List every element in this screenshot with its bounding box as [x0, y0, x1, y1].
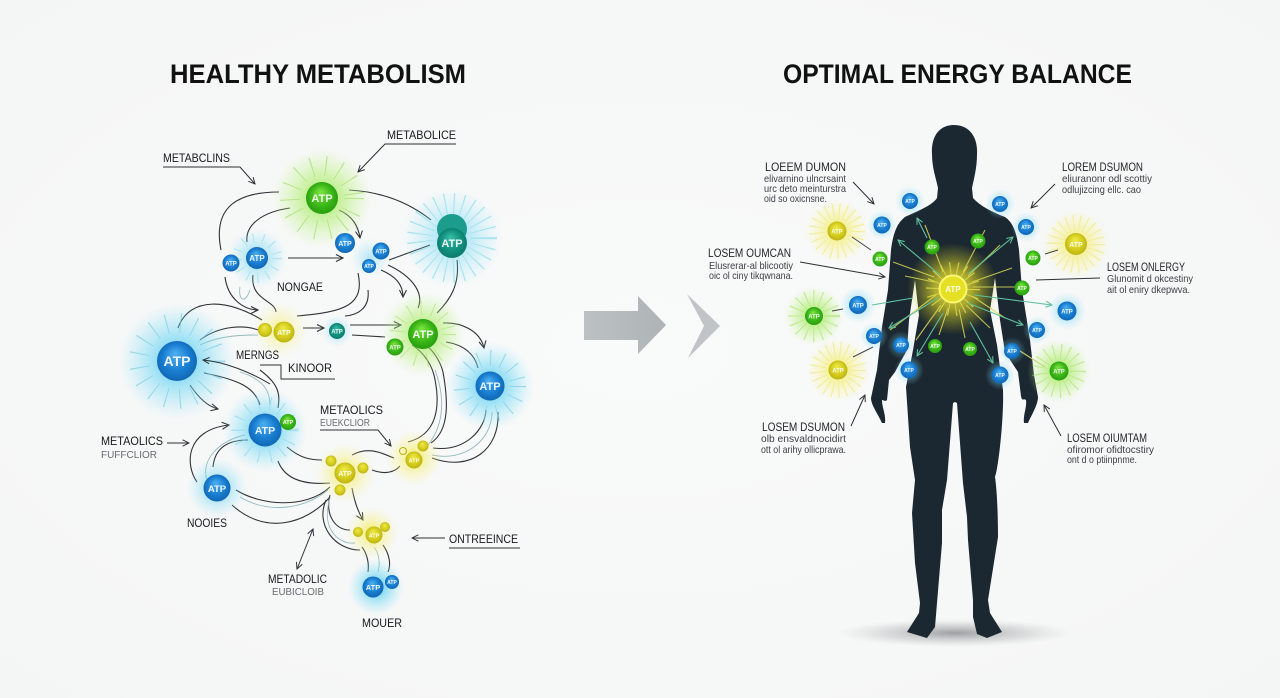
node: blue ATP lower: ATP: [208, 484, 227, 495]
node: yellow cluster center: ATP: [338, 471, 352, 478]
node: yellow cluster lower: [346, 507, 398, 559]
node: blue ATP bottom: ATP: [387, 580, 397, 586]
node: small teal: [321, 315, 353, 347]
node: green left: [784, 286, 844, 346]
text block: middle left: [708, 248, 885, 282]
node: blue ATP pair: ATP: [225, 262, 237, 268]
node: yellow ATP pair: [252, 302, 308, 358]
text block: upper left: [764, 162, 874, 205]
node: yellow cluster center: [315, 443, 375, 503]
node: blue ATP bottom: [348, 559, 404, 615]
text block: upper left: urc deto meinturstra: [764, 183, 846, 195]
arrow: grey block arrow: [584, 296, 666, 354]
node: blue ATP pair: ATP: [249, 254, 265, 263]
label: METADOLIC: [268, 529, 327, 598]
node: green left: ATP: [808, 314, 820, 320]
node: yellow lower left: [806, 338, 870, 402]
arrow: grey chevron: [687, 294, 720, 358]
small green nodes: ATP: [930, 344, 940, 350]
text block: upper right: LOREM DSUMON: [1062, 162, 1143, 174]
text block: lower right: ofiromor ofidtocstiry: [1067, 444, 1155, 456]
small blue nodes: ATP: [1007, 349, 1017, 355]
text block: upper right: eliuranonr odl scottiy: [1062, 173, 1153, 185]
label: NONGAE: NONGAE: [277, 280, 323, 294]
node: blue ATP right: [446, 342, 534, 430]
small blue nodes: ATP: [904, 368, 914, 374]
label: METADOLIC: EUBICLOIB: [272, 587, 324, 598]
label: MOUER: MOUER: [362, 616, 402, 630]
node: small blue cluster: ATP: [364, 264, 374, 270]
small green nodes: ATP: [1028, 256, 1038, 262]
text block: middle right: LOSEM ONLERGY: [1107, 262, 1185, 274]
node: blue ATP lower: [187, 458, 247, 518]
small blue nodes: [840, 186, 1086, 390]
label: METABCLINS: [163, 151, 255, 184]
node: teal ATP: [402, 188, 502, 288]
label: METAOLICS left: FUFFCLIOR: [101, 450, 157, 461]
floor shadow: [837, 619, 1073, 647]
text block: middle right: ait ol eniry dkepwva.: [1107, 284, 1190, 296]
node: blue ATP right: ATP: [479, 381, 501, 393]
text block: lower right: ont d o ptiinpnme.: [1067, 454, 1137, 466]
arrow: to large blue node: [203, 360, 270, 384]
label: METAOLICS centre: [320, 403, 391, 446]
panel: metabolic network: [101, 128, 534, 630]
text block: middle left: oic ol ciny tikqwnana.: [709, 270, 793, 282]
small blue nodes: ATP: [995, 373, 1005, 379]
title: Healthy Metabolism: HEALTHY METABOLISM: [170, 59, 466, 89]
node: small teal: ATP: [331, 330, 343, 336]
label: METAOLICS centre: EUEKCLIOR: [320, 418, 370, 429]
node: central yellow ATP: ATP: [945, 285, 961, 294]
node: green ATP pair: ATP: [389, 346, 401, 352]
connector stubs: [832, 237, 1058, 357]
node: small blue cluster: ATP: [338, 241, 352, 248]
small green nodes: ATP: [965, 347, 975, 353]
node: yellow ATP pair: ATP: [277, 330, 291, 337]
central energy rays: [872, 218, 1052, 367]
text block: middle left: Elusrerar-al blicootiy: [709, 260, 794, 272]
node: blue ATP with green: ATP: [283, 420, 294, 426]
text block: middle left: LOSEM OUMCAN: [708, 248, 791, 260]
small blue nodes: ATP: [995, 202, 1005, 208]
small green nodes: ATP: [973, 239, 983, 245]
connector curves: [178, 190, 498, 572]
node: blue ATP bottom: ATP: [366, 583, 380, 592]
node: central yellow ATP: [940, 276, 966, 302]
body silhouette: [871, 125, 1038, 638]
label: NOOIES: NOOIES: [187, 516, 227, 530]
small green nodes: [872, 234, 1040, 356]
text block: lower left: olb ensvaldnocidirt: [761, 433, 846, 445]
text block: upper right: [1031, 162, 1153, 208]
node: blue ATP pair: [222, 228, 287, 288]
label: MERNGS: MERNGS: [236, 348, 279, 362]
node: yellow upper right: ATP: [1069, 242, 1083, 249]
node: teal ATP: ATP: [441, 238, 463, 250]
text block: upper left: LOEEM DUMON: [765, 162, 846, 174]
small blue nodes: ATP: [905, 199, 915, 205]
node: yellow upper right: [1042, 210, 1110, 278]
small green nodes: ATP: [927, 245, 937, 251]
text block: middle right: Glunomit d okcestiny: [1107, 273, 1194, 285]
label: ONTREEINCE: [412, 532, 520, 548]
title: Optimal Energy Balance: OPTIMAL ENERGY BALANCE: [783, 59, 1132, 89]
small blue nodes: ATP: [877, 223, 887, 229]
label: KINOOR: [260, 361, 335, 379]
node: yellow cluster right: [386, 430, 442, 486]
text block: middle right: [1036, 262, 1194, 296]
small blue nodes: ATP: [1021, 225, 1031, 231]
node: blue ATP with green: ATP: [255, 425, 275, 437]
node: large blue ATP: [119, 303, 235, 419]
text block: lower right: [1044, 405, 1155, 466]
node: blue ATP with green: [223, 388, 307, 472]
node: green ATP: ATP: [311, 193, 333, 205]
node: yellow upper left: [805, 199, 869, 263]
node: yellow cluster lower: ATP: [369, 534, 380, 540]
small blue nodes: ATP: [1032, 328, 1042, 334]
text block: lower right: LOSEM OIUMTAM: [1067, 433, 1147, 445]
node: large blue ATP: ATP: [164, 353, 190, 369]
node: green ATP: [272, 148, 372, 248]
pale connector curves: [200, 287, 492, 572]
text block: lower left: [761, 395, 865, 456]
text block: upper left: elivarnino ulncrsaint: [764, 173, 846, 185]
node: yellow upper left: ATP: [831, 230, 843, 236]
small green nodes: ATP: [1017, 286, 1027, 292]
node: green right: [1027, 339, 1091, 403]
small blue nodes: ATP: [1061, 310, 1073, 316]
panel: human body energy map: [708, 125, 1194, 647]
small green nodes: ATP: [875, 257, 885, 263]
node: small blue cluster: ATP: [375, 250, 387, 256]
node: yellow lower left: ATP: [832, 368, 844, 374]
node: yellow cluster right: ATP: [409, 458, 420, 464]
label: METAOLICS left: METAOLICS: [101, 434, 163, 448]
text block: upper right: odlujizcing ellc. cao: [1062, 184, 1141, 196]
label: METAOLICS left: [101, 434, 189, 461]
node: green right: ATP: [1053, 370, 1065, 376]
label: METABOLICE: METABOLICE: [387, 128, 456, 142]
text block: lower left: ott ol arihy ollicprawa.: [761, 444, 846, 456]
node: green ATP pair: [381, 292, 465, 376]
node: small blue cluster: [335, 233, 390, 278]
label: METAOLICS centre: METAOLICS: [320, 403, 383, 417]
label: METABCLINS: METABCLINS: [163, 151, 230, 165]
text block: lower left: LOSEM DSUMON: [762, 422, 845, 434]
label: KINOOR: KINOOR: [288, 361, 332, 375]
label: ONTREEINCE: ONTREEINCE: [449, 532, 518, 546]
label: METABOLICE: [358, 128, 456, 172]
small blue nodes: ATP: [869, 334, 879, 340]
node: green ATP pair: ATP: [412, 329, 434, 341]
small blue nodes: ATP: [896, 343, 906, 349]
text block: upper left: oid so oxicnsne.: [764, 193, 827, 205]
small blue nodes: ATP: [852, 304, 864, 310]
label: METADOLIC: METADOLIC: [268, 572, 327, 586]
